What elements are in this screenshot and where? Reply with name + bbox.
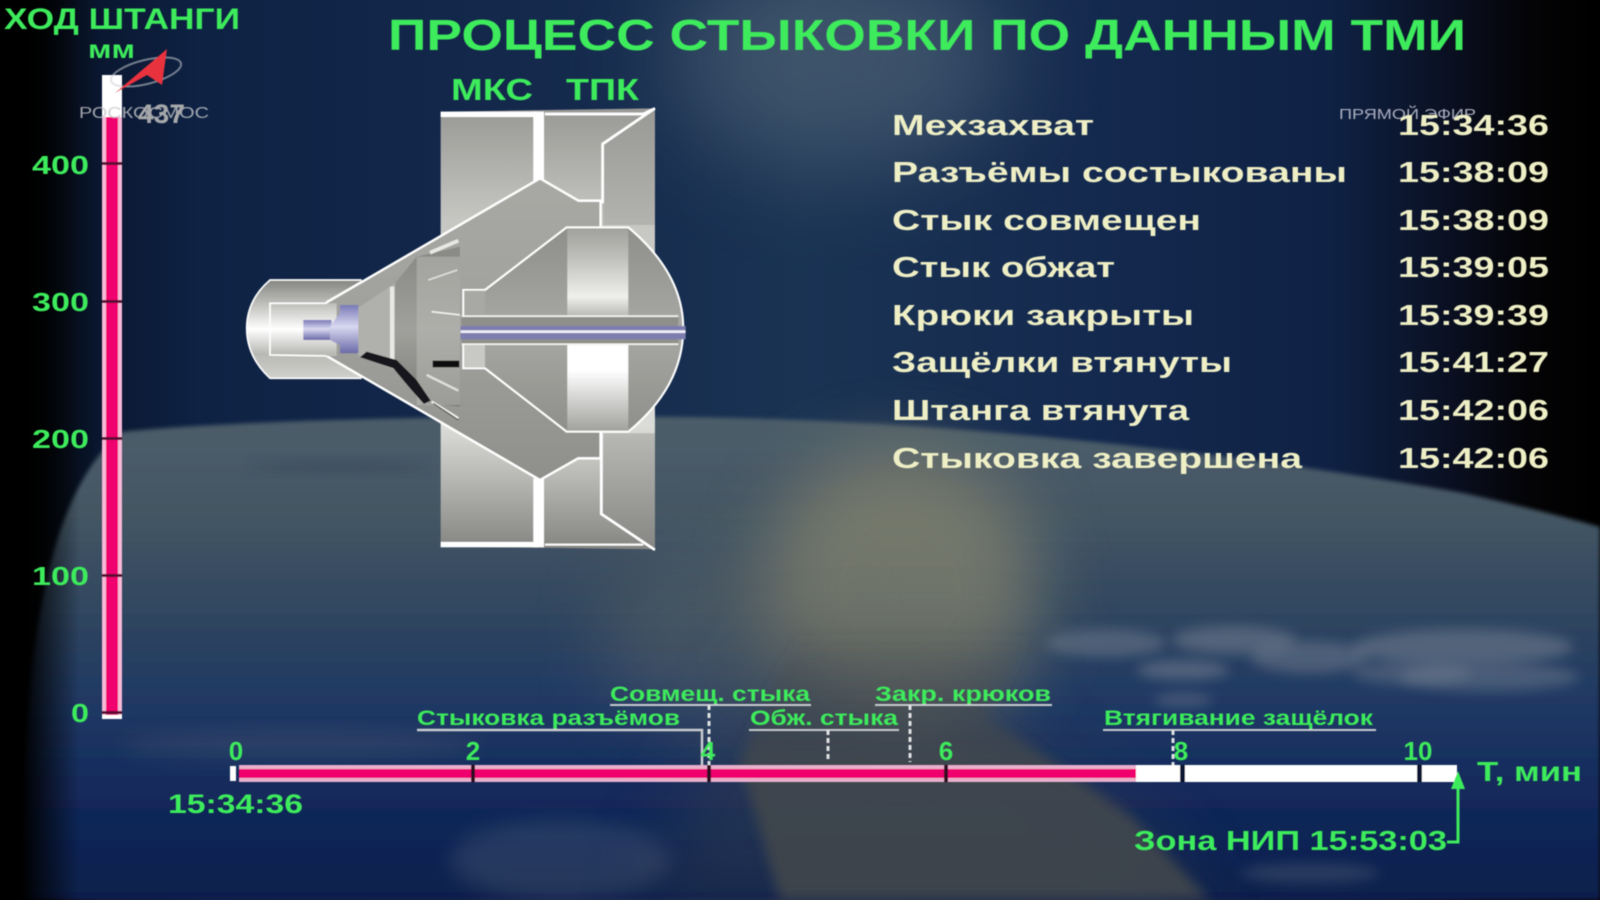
- probe tip: [303, 305, 358, 353]
- docking mechanism cross-section diagram: [247, 108, 686, 550]
- station cone: [327, 178, 601, 480]
- row: Крюки закрыты: 15:39:39: [1398, 300, 1549, 332]
- timeline bar: 8: [1174, 736, 1188, 766]
- module labels: МКС: [451, 72, 533, 107]
- timeline bar: 10: [1404, 736, 1432, 766]
- row: Стыковка завершена: [892, 443, 1549, 475]
- ground station zone callout: Зона НИП 15:53:03: [1134, 825, 1447, 856]
- vertical rod travel gauge: 100: [32, 561, 89, 591]
- module labels: [451, 72, 639, 107]
- label: Стыковка разъёмов: Стыковка разъёмов: [417, 707, 680, 730]
- row: Стык обжат: Стык обжат: [892, 252, 1115, 284]
- module labels: ТПК: [566, 72, 639, 107]
- label: Закр. крюков: Закр. крюков: [875, 683, 1051, 706]
- event time table: [892, 110, 1549, 475]
- gauge heading: ХОД ШТАНГИ: [4, 3, 240, 36]
- row: Стык обжат: 15:39:05: [1398, 252, 1549, 284]
- row: Штанга втянута: 15:42:06: [1398, 395, 1549, 427]
- timeline axis unit: Т, мин: [1477, 756, 1582, 787]
- row: Мехзахват: [892, 110, 1549, 142]
- tube interior: [270, 283, 395, 370]
- row: Защёлки втянуты: Защёлки втянуты: [892, 347, 1232, 379]
- gauge value: 437: [138, 99, 185, 129]
- gauge heading: [4, 3, 240, 64]
- row: Разъёмы состыкованы: [892, 157, 1549, 189]
- vertical rod travel gauge: [32, 75, 122, 728]
- label: Обж. стыка: Обж. стыка: [750, 707, 898, 730]
- vertical rod travel gauge: 400: [32, 150, 89, 180]
- row: Мехзахват: Мехзахват: [892, 110, 1094, 142]
- label: Стыковка разъёмов: [417, 707, 702, 765]
- row: Стык совмещен: Стык совмещен: [892, 205, 1201, 237]
- live broadcast caption: ПРЯМОЙ ЭФИР: [1339, 105, 1476, 123]
- row: Разъёмы состыкованы: 15:38:09: [1398, 157, 1549, 189]
- icon: Roscosmos logo: [79, 49, 209, 122]
- probe head body: [360, 241, 460, 420]
- row: Штанга втянута: Штанга втянута: [892, 395, 1190, 427]
- timeline bar: 6: [939, 736, 953, 766]
- vertical rod travel gauge: 300: [32, 287, 89, 317]
- row: Защёлки втянуты: 15:41:27: [1398, 347, 1549, 379]
- row: Мехзахват: 15:34:36: [1398, 110, 1549, 142]
- row: Стык обжат: [892, 252, 1549, 284]
- label: Совмещ. стыка: Совмещ. стыка: [610, 683, 810, 706]
- vertical rod travel gauge: 0: [71, 698, 89, 728]
- row: Разъёмы состыкованы: Разъёмы состыкованы: [892, 157, 1347, 189]
- ship capsule: [463, 227, 683, 432]
- timeline bar: 0: [229, 736, 243, 766]
- outer nose housing: [247, 280, 362, 378]
- row: Стык совмещен: 15:38:09: [1398, 205, 1549, 237]
- row: Стыковка завершена: Стыковка завершена: [892, 443, 1303, 475]
- timeline start time: 15:34:36: [168, 789, 303, 819]
- vertical rod travel gauge: 200: [32, 424, 89, 454]
- row: Крюки закрыты: Крюки закрыты: [892, 300, 1194, 332]
- arrow: ground station zone: [1447, 771, 1465, 842]
- capture rod: [461, 315, 686, 345]
- row: Защёлки втянуты: [892, 347, 1549, 379]
- row: Стык совмещен: [892, 205, 1549, 237]
- timeline bar: 2: [466, 736, 480, 766]
- title: ПРОЦЕСС СТЫКОВКИ ПО ДАННЫМ ТМИ: [388, 11, 1466, 60]
- station and ship collar walls: [441, 108, 655, 550]
- row: Крюки закрыты: [892, 300, 1549, 332]
- icon: Roscosmos logo: РОСКОСМОС: [79, 105, 209, 122]
- gauge heading: мм: [88, 36, 135, 64]
- row: Штанга втянута: [892, 395, 1549, 427]
- timeline bar: [229, 736, 1457, 782]
- timeline event labels: [417, 683, 1376, 765]
- row: Стыковка завершена: 15:42:06: [1398, 443, 1549, 475]
- timeline bar: 4: [701, 736, 716, 766]
- label: Втягивание защёлок: Втягивание защёлок: [1104, 707, 1374, 730]
